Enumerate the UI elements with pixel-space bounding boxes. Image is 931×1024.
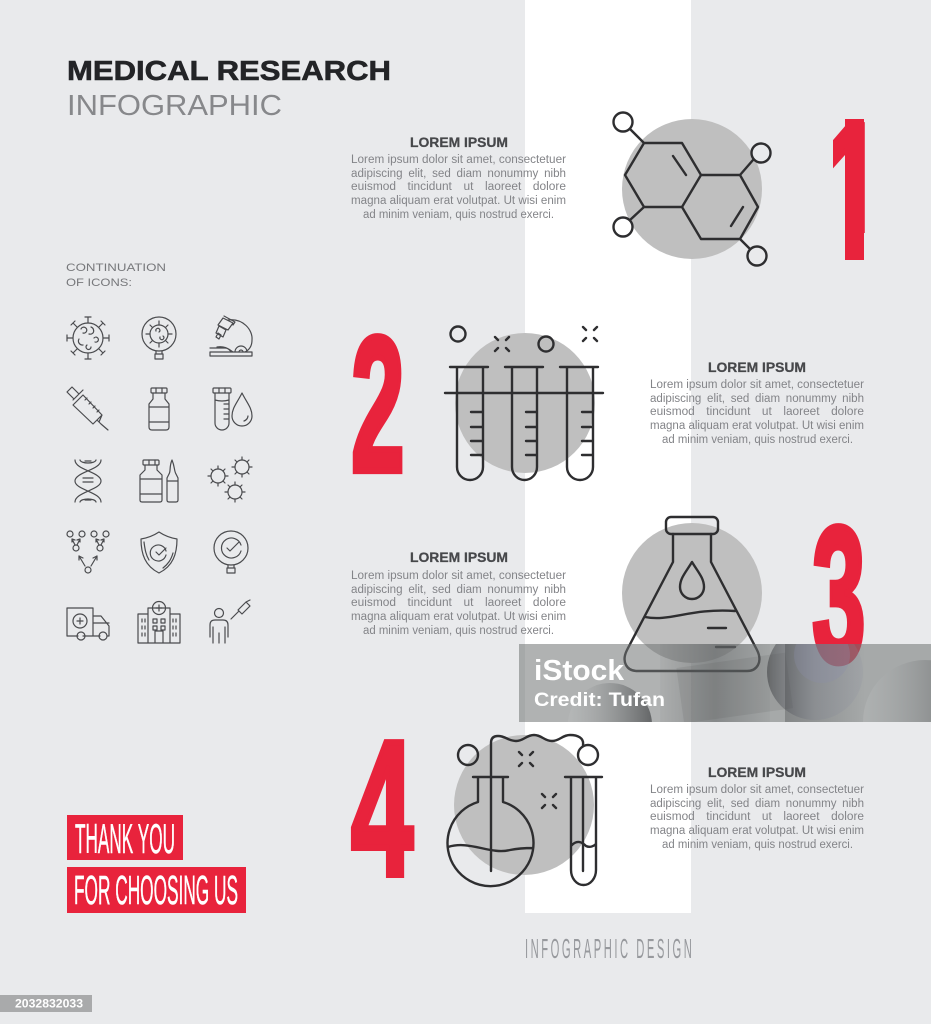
number 1: 1 [823,84,883,300]
icon: hospital [138,602,180,643]
icon: test tube and drop [213,388,252,430]
step 4 text: adipiscing elit, sed diam nonummy nibh [650,798,864,810]
step 1 text: LOREM IPSUM [410,135,508,150]
icon: DNA [75,460,101,502]
icon: vial [149,388,169,430]
step 4 [351,701,864,917]
step 4 text [650,765,864,851]
thank you banner [67,815,246,913]
step 3 text: adipiscing elit, sed diam nonummy nibh [351,584,566,596]
icon: microscope [210,316,252,356]
title: INFOGRAPHIC [67,90,282,122]
step 2 text: ad minim veniam, quis nostrud exerci. [662,434,853,446]
title: MEDICAL RESEARCH [67,55,391,86]
icon: branching nodes [67,531,109,573]
step 4 text: Lorem ipsum dolor sit amet, consectetuer [650,784,864,796]
icon: bottle and ampoule [140,460,178,502]
image id stamp: 2032832033 [15,996,83,1010]
icon: round flask and tube [448,735,602,886]
continuation of icons label: OF ICONS: [66,277,132,289]
step 1 text: adipiscing elit, sed diam nonummy nibh [351,168,566,180]
white center strip [525,0,691,913]
step 4 text: magna aliquam erat volutpat. Ut wisi enim [650,825,864,837]
step 3 text: euismod tincidunt ut laoreet dolore [351,597,566,609]
step 3 text: magna aliquam erat volutpat. Ut wisi enim [351,611,566,623]
continuation of icons label: CONTINUATION [66,262,166,274]
step 2 text: euismod tincidunt ut laoreet dolore [650,406,864,418]
step 4 text: ad minim veniam, quis nostrud exerci. [662,839,853,851]
title [67,55,391,122]
icon grid [67,316,252,643]
step 3 text: Lorem ipsum dolor sit amet, consectetuer [351,570,566,582]
step 1 [352,111,865,267]
thank you banner: THANK YOU [75,815,175,862]
step 2 [351,298,864,513]
icon: check magnifier [214,531,248,573]
icon: molecule [614,112,770,266]
step 1 text [351,135,566,221]
number 3: 3 [812,488,866,703]
step 1 text: ad minim veniam, quis nostrud exerci. [363,209,554,221]
icon: virus [67,317,109,359]
number 1 [833,119,865,260]
icon: flask [622,517,762,671]
continuation of icons label [66,262,166,289]
step 4 text: LOREM IPSUM [708,765,806,780]
step 1 text: magna aliquam erat volutpat. Ut wisi enim [351,195,566,207]
icon: shield check [141,532,177,573]
icon: syringe [67,387,108,430]
watermark band: iStock [534,655,625,687]
step 2 text: LOREM IPSUM [708,360,806,375]
icon: ambulance [67,608,109,640]
icon: virus cluster [208,457,252,502]
step 3 [351,488,866,703]
step 3 text: ad minim veniam, quis nostrud exerci. [363,625,554,637]
image id stamp [0,995,92,1012]
step 2 text [650,360,864,446]
step 3 text [351,550,566,637]
step 4 text: euismod tincidunt ut laoreet dolore [650,811,864,823]
watermark band: Credit: Tufan [534,690,665,711]
step 1 text: Lorem ipsum dolor sit amet, consectetuer [351,154,566,166]
text: FOR CHOOSING US [74,867,238,913]
step 3 text: LOREM IPSUM [410,550,508,565]
watermark band [519,644,931,722]
icon: person and syringe [210,600,250,643]
number 2: 2 [351,298,405,513]
step 2 text: adipiscing elit, sed diam nonummy nibh [650,393,864,405]
icon: test tubes [445,326,603,480]
infographic design caption: INFOGRAPHIC DESIGN [525,933,692,965]
number 4: 4 [351,701,413,917]
icon: virus under magnifier [142,317,176,359]
step 2 text: magna aliquam erat volutpat. Ut wisi enim [650,420,864,432]
step 2 text: Lorem ipsum dolor sit amet, consectetuer [650,379,864,391]
step 1 text: euismod tincidunt ut laoreet dolore [351,181,566,193]
